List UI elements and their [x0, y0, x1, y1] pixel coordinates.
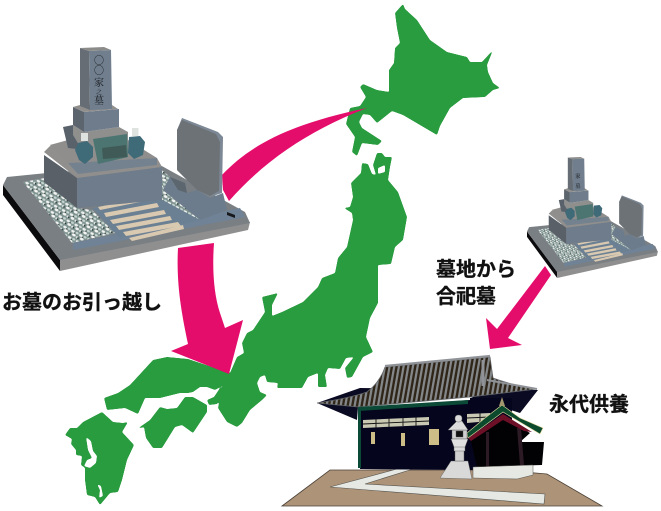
second tier	[50, 142, 70, 163]
arrow: large pink arrow down to Kansai	[171, 243, 243, 374]
stepping stones	[98, 198, 184, 241]
eave underside	[317, 388, 538, 420]
arrow: Hokkaido to left grave	[222, 108, 367, 201]
tiled roof	[317, 357, 537, 407]
Kyushu	[65, 412, 134, 505]
small gravestone illustration: 墓	[575, 182, 581, 190]
small gravestone illustration	[527, 157, 658, 278]
third tier	[63, 125, 85, 150]
gate finial	[499, 397, 505, 406]
main stele	[80, 47, 112, 110]
main hall wall	[359, 400, 470, 470]
Shikoku	[137, 397, 207, 448]
gravel right	[162, 170, 200, 220]
pedestal left face	[44, 155, 77, 208]
gate steps	[473, 465, 533, 479]
inscription: ○	[94, 52, 104, 67]
green beam	[358, 400, 468, 411]
label: from cemetery to shared grave: 墓地から	[436, 258, 516, 281]
label: moving a grave: お墓のお引っ越し	[2, 291, 162, 314]
main stele: ○	[94, 62, 104, 77]
frame top	[3, 165, 250, 260]
gravel left	[23, 178, 115, 243]
label: perpetual memorial: 永代供養	[549, 393, 629, 416]
roof ridge	[385, 356, 490, 366]
arrow: small grave to temple	[486, 266, 551, 349]
gate building dark interior	[470, 417, 544, 467]
stone path	[330, 469, 545, 504]
large gravestone illustration	[3, 47, 250, 271]
base side black	[3, 185, 60, 271]
gate posts	[486, 428, 524, 467]
paved path	[92, 197, 200, 238]
temple illustration	[282, 356, 602, 506]
vases and incense holder	[75, 128, 145, 164]
base front	[60, 222, 250, 271]
gate roof green band	[467, 405, 543, 438]
pedestal front face	[77, 167, 162, 208]
small gravestone illustration: 家	[575, 172, 581, 180]
temple ground	[282, 470, 602, 506]
memorial slab	[163, 118, 235, 220]
main stele: 家	[94, 74, 104, 89]
front kerb	[73, 208, 245, 250]
Awaji island	[207, 386, 227, 405]
Hokkaido	[346, 4, 500, 156]
main stele: 之	[96, 87, 102, 96]
map of Japan	[65, 4, 500, 505]
fourth tier	[73, 107, 84, 132]
stone lantern	[440, 415, 472, 479]
gate roof red underside	[468, 414, 532, 441]
label: from cemetery to shared grave: 合祀墓	[436, 285, 496, 308]
main stele: 墓	[94, 92, 104, 107]
Honshu	[104, 153, 407, 427]
yellow windows	[371, 429, 439, 446]
pedestal top	[44, 146, 162, 178]
lattice windows	[363, 413, 490, 428]
